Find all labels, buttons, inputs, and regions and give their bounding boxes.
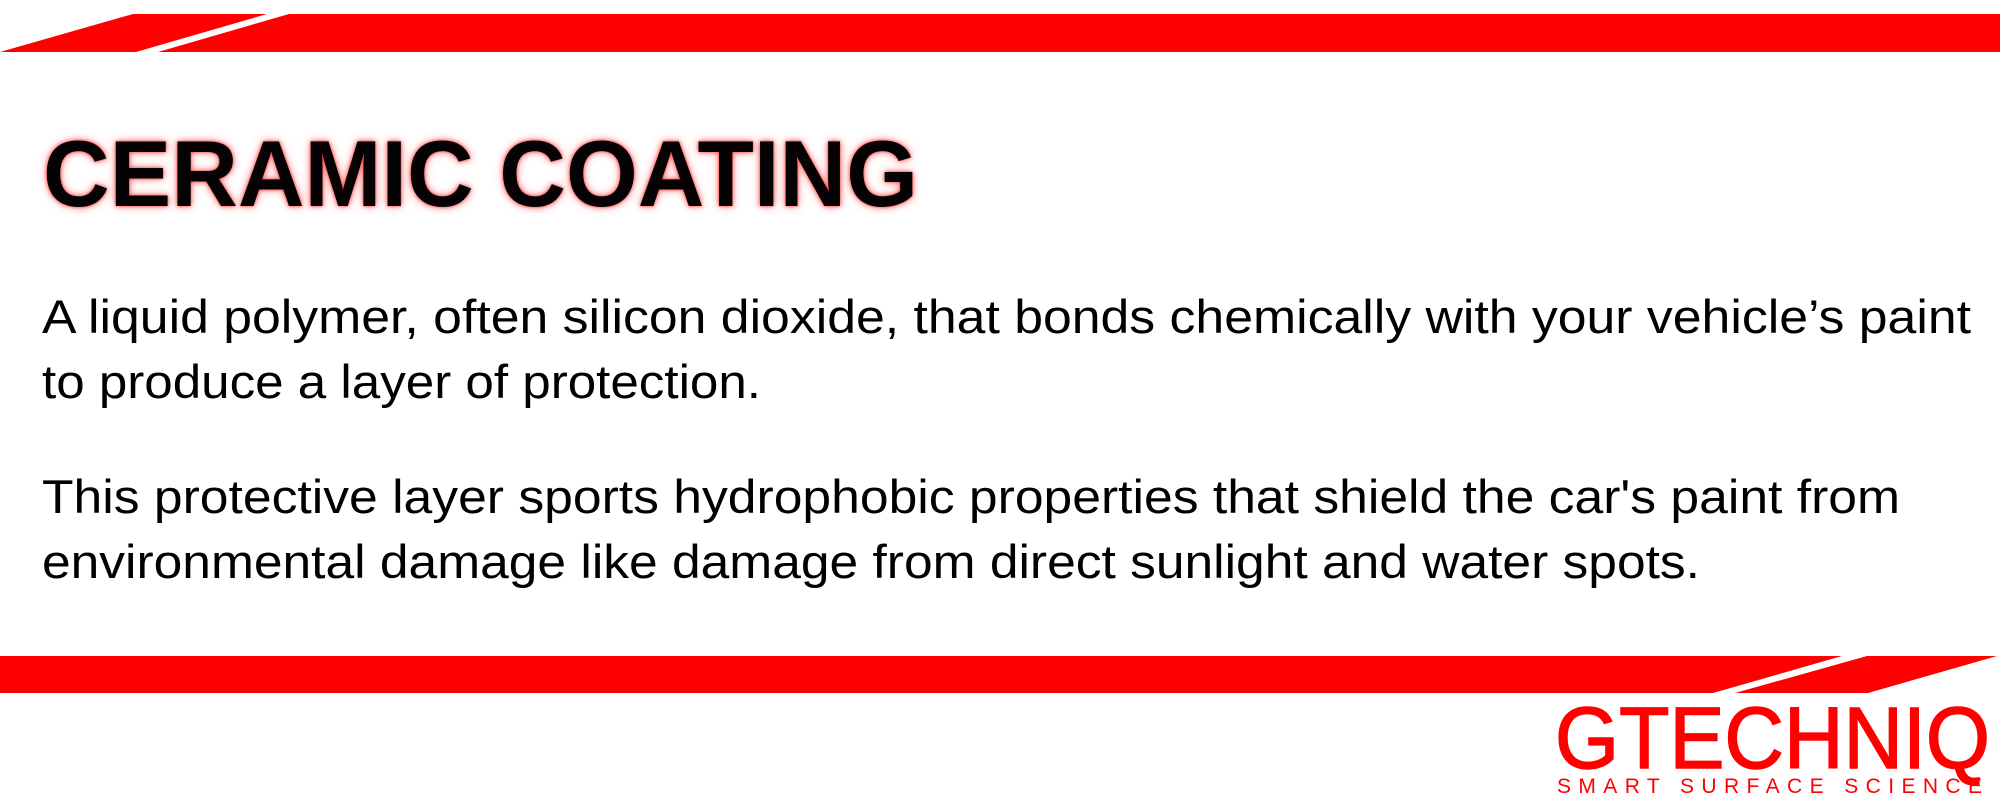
paragraph 1 (42, 290, 1971, 408)
bottom red stripe (0, 656, 1997, 693)
paragraph 1: A liquid polymer, often silicon dioxide, that bonds chemically with your vehicle’s paint (42, 290, 1971, 343)
title: CERAMIC COATING (43, 121, 918, 226)
top red stripe (0, 14, 2000, 52)
paragraph 1: to produce a layer of protection. (42, 355, 761, 408)
paragraph 2 (42, 470, 1900, 588)
logo: GTECHNIQ: SMART SURFACE SCIENCE (1557, 775, 1982, 798)
paragraph 2: environmental damage like damage from direct sunlight and water spots. (42, 535, 1700, 588)
paragraph 2: This protective layer sports hydrophobic properties that shield the car's paint from (42, 470, 1900, 523)
